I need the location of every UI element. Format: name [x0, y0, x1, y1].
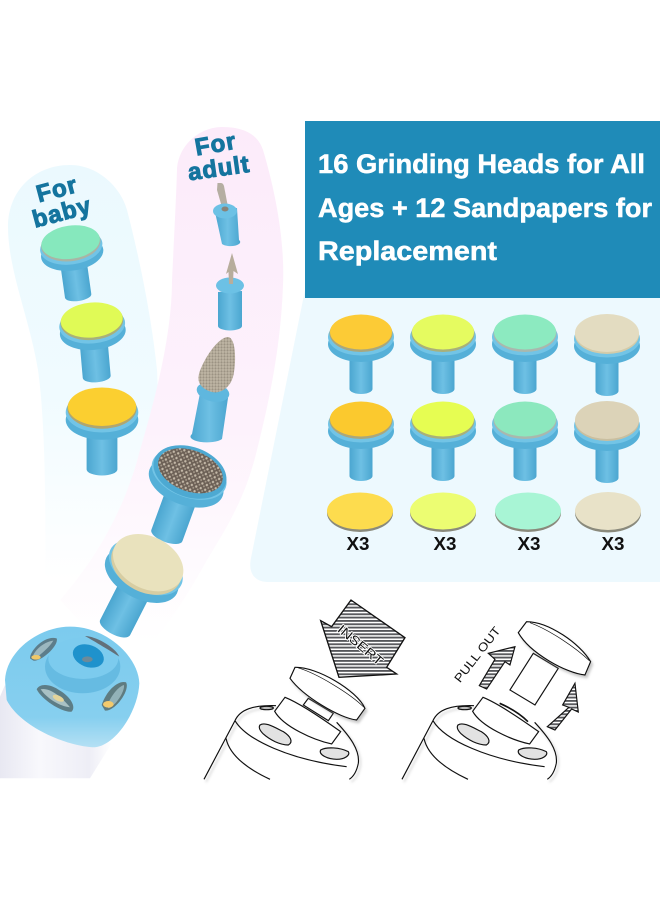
label: for baby [30, 171, 95, 234]
adult head: felt disc [77, 522, 195, 652]
quantity labels [346, 534, 624, 554]
heading: Replacement [318, 236, 497, 266]
sandpaper: orange [327, 492, 393, 532]
head: felt row 1 [574, 314, 640, 396]
sandpaper: felt [575, 492, 641, 532]
adult bit: large cone [190, 337, 235, 442]
label: for adult: For [193, 128, 239, 162]
quantity labels: X3 [602, 534, 624, 554]
baby head: green [37, 221, 110, 305]
arrow: pull out right [547, 683, 578, 730]
label: for baby: baby [30, 192, 95, 234]
sandpapers row [327, 492, 641, 532]
label: for adult [186, 128, 252, 186]
panel: replacement set background [250, 290, 660, 582]
label: for baby: For [33, 171, 81, 208]
panel: for adult band [60, 127, 283, 670]
head: orange row 1 [328, 314, 394, 394]
adult bit: cylinder [213, 183, 240, 246]
arrow: insert [321, 600, 405, 677]
diagram: insert [204, 600, 405, 779]
label: for adult: adult [186, 151, 252, 186]
detached head outline [510, 622, 591, 705]
baby head: yellow [57, 300, 130, 385]
heading: 16 Grinding Heads for All [318, 149, 645, 179]
device outline: insert [204, 697, 358, 779]
heading: Ages + 12 Sandpapers for [318, 193, 652, 223]
grinding heads: row 1 [328, 314, 640, 396]
panel: title banner [305, 121, 660, 298]
arrow: pull out left [479, 647, 515, 689]
head outline: insert [290, 667, 365, 720]
device: blue cap and white body [0, 627, 139, 778]
head: green row 2 [492, 402, 558, 481]
adult head: diamond disc [128, 435, 235, 555]
heading [318, 149, 652, 266]
diagram: pull out [402, 622, 591, 779]
head: yellow row 1 [410, 314, 476, 394]
device outline: pull out [402, 697, 556, 779]
baby head: orange [66, 387, 138, 475]
quantity labels: X3 [518, 534, 540, 554]
head: felt row 2 [574, 401, 640, 483]
panel: for baby band [8, 165, 158, 580]
sandpaper: green [495, 492, 561, 532]
grinding heads: row 2 [328, 401, 640, 483]
head: green row 1 [492, 314, 558, 394]
sandpaper: yellow [410, 492, 476, 532]
adult bit: cone [216, 253, 244, 330]
label: pull out: PULL OUT [451, 623, 504, 685]
quantity labels: X3 [346, 534, 370, 554]
head: orange row 2 [328, 402, 394, 481]
quantity labels: X3 [434, 534, 456, 554]
head: yellow row 2 [410, 402, 476, 481]
arrow: insert: INSERT [335, 622, 386, 669]
